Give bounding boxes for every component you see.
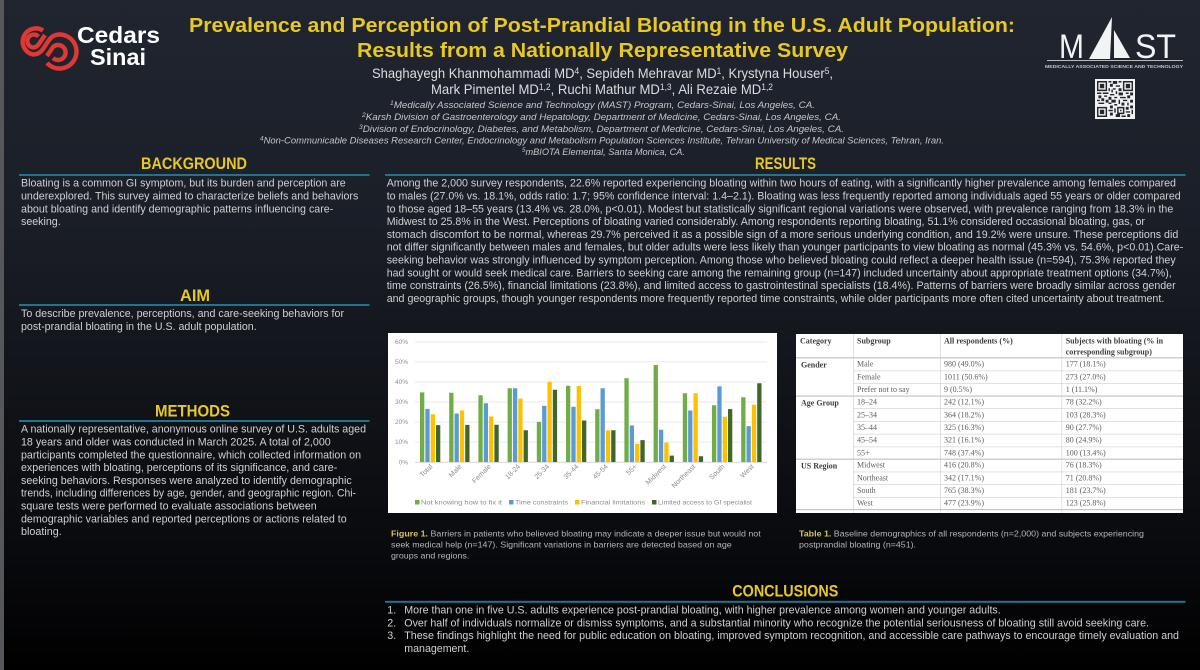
authors: 5 xyxy=(825,66,829,76)
authors: 1,2 xyxy=(761,82,773,92)
row group: US region: Northeast xyxy=(857,473,889,482)
row group: US region: US Region xyxy=(801,462,838,470)
logo: MAST xyxy=(1045,17,1183,69)
legend: Not knowing how to fix it xyxy=(421,500,502,506)
bar chart: barriers to seeking care xyxy=(388,333,777,513)
affiliations xyxy=(260,100,944,158)
affiliations: Medically Associated Science and Technology (MAST) Program, Cedars-Sinai, Los Angeles, CA. xyxy=(394,100,815,111)
row group: gender xyxy=(801,360,1106,394)
numbered list: 1. xyxy=(387,604,396,616)
row group: gender: Male xyxy=(857,360,874,369)
row group: US region: 76 (18.3%) xyxy=(1066,461,1102,470)
row group: age group: 35–44 xyxy=(857,423,877,432)
text block: experiences with bloating, perceptions of its significance, and care- xyxy=(21,462,338,474)
legend: Time constraints xyxy=(515,500,569,506)
figure caption: seek medical help (n=147). Significant variations in barriers are detected based on age xyxy=(391,540,732,550)
y axis labels: 0% xyxy=(399,459,408,466)
text block: stomach discomfort to be normal, whereas 29.7% perceived it as a possible sign of a more serious underlying condition, and 19.2% were unsure. These perceptions did xyxy=(387,229,1178,241)
authors: Shaghayegh Khanmohammadi MD xyxy=(372,65,590,81)
row group: age group: 78 (32.2%) xyxy=(1066,397,1102,406)
row group: age group: Age Group xyxy=(801,398,839,408)
text block: A nationally representative, anonymous online survey of U.S. adults aged xyxy=(21,424,366,436)
table header: Category xyxy=(800,336,832,346)
x axis labels xyxy=(419,463,756,490)
row group: US region: 123 (25.8%) xyxy=(1066,499,1106,508)
authors: 1,2 xyxy=(539,82,551,92)
row group: US region: 342 (17.1%) xyxy=(944,473,984,482)
wordmark: Cedars xyxy=(77,22,160,48)
y axis labels: 30% xyxy=(395,399,408,406)
row group: US region: South xyxy=(857,486,876,495)
authors: 1,3 xyxy=(660,82,672,92)
x axis labels: 55+ xyxy=(625,463,639,477)
text block: about bloating and identify demographic patterns influencing care- xyxy=(21,203,334,215)
text block: underexplored. This survey aimed to characterize beliefs and behaviors xyxy=(21,190,358,202)
row group: US region: Midwest xyxy=(857,461,886,470)
row group: age group: 80 (24.9%) xyxy=(1066,436,1102,445)
panel: conclusions xyxy=(385,582,1186,655)
row group: age group: 25–34 xyxy=(857,410,877,419)
y axis labels: 20% xyxy=(395,419,408,426)
affiliations: 3 xyxy=(359,124,363,131)
affiliations: 2 xyxy=(361,112,366,119)
numbered list: 2. xyxy=(387,617,396,629)
text block: square tests were performed to evaluate associations between xyxy=(21,500,317,512)
figure caption: Figure 1. Barriers in patients who believed bloating may indicate a deeper issue but would not xyxy=(391,529,761,539)
heading: CONCLUSIONS xyxy=(732,582,838,601)
table: baseline demographics xyxy=(796,334,1183,513)
legend: Financial limitations xyxy=(581,500,646,506)
table caption: postprandial bloating (n=451). xyxy=(799,540,916,550)
row group: age group: 55+ xyxy=(857,448,870,457)
series: limited access to GI specialist xyxy=(436,383,762,462)
row group: gender: 273 (27.0%) xyxy=(1066,372,1106,381)
row group: gender: Prefer not to say xyxy=(857,385,910,394)
icon: QR code xyxy=(1095,79,1135,119)
row group: age group: 748 (37.4%) xyxy=(944,448,984,457)
table header: All respondents (%) xyxy=(944,336,1013,346)
text block: post-prandial bloating in the U.S. adult population. xyxy=(21,321,257,333)
series: time constraints xyxy=(425,386,751,462)
authors: , Ruchi Mathur MD xyxy=(551,81,660,97)
x axis labels: 35-44 xyxy=(563,463,580,481)
heading: BACKGROUND xyxy=(141,154,247,173)
text block: demographic variables and reported perceptions or actions related to xyxy=(21,513,347,525)
title: Results from a Nationally Representative Survey xyxy=(357,39,849,62)
numbered list xyxy=(387,604,1179,655)
wordmark letters: M xyxy=(1059,28,1084,66)
y axis labels: 60% xyxy=(395,339,408,346)
icon: sails xyxy=(1089,17,1130,59)
icon: interlocking red rings xyxy=(23,28,77,68)
authors: , Krystyna Houser xyxy=(721,65,825,81)
affiliations: Division of Endocrinology, Diabetes, and Metabolism, Department of Medicine, Cedars-Sinai, Los Angeles, CA. xyxy=(363,124,844,135)
row group: US region: 181 (23.7%) xyxy=(1066,486,1106,495)
numbered list: More than one in five U.S. adults experience post-prandial bloating, with higher prevalence among women and younger adults. xyxy=(404,604,1001,616)
text block xyxy=(387,178,1184,305)
table header: Subjects with bloating (% in xyxy=(1066,336,1164,346)
text block xyxy=(21,424,366,538)
row group: gender: 980 (49.0%) xyxy=(944,360,984,369)
authors: , Ali Rezaie MD xyxy=(672,81,761,97)
y axis labels: 50% xyxy=(395,359,408,366)
affiliations: 1 xyxy=(390,100,394,107)
numbered list: 3. xyxy=(387,630,396,642)
x axis labels: Male xyxy=(448,463,464,479)
text block: seeking behaviors. Responses were analyzed to identify demographic xyxy=(21,475,352,487)
x axis labels: Total xyxy=(419,463,435,479)
legend xyxy=(415,500,752,506)
title: Prevalence and Perception of Post-Prandial Bloating in the U.S. Adult Population: xyxy=(189,14,1015,37)
affiliations: 4 xyxy=(260,136,264,142)
text block: participants completed the questionnaire, which collected information on xyxy=(21,449,361,461)
panel: results xyxy=(385,154,1186,305)
logo: Cedars-Sinai: Sinai xyxy=(90,44,146,70)
x axis labels: West xyxy=(739,463,756,480)
row group: US region xyxy=(801,461,1106,508)
row group: age group: 103 (28.3%) xyxy=(1066,410,1106,419)
y axis labels: 10% xyxy=(395,439,408,446)
row group: age group: 45–54 xyxy=(857,436,877,445)
row group: age group: 100 (13.4%) xyxy=(1066,448,1106,457)
row group: gender: 177 (18.1%) xyxy=(1066,360,1106,369)
text block: Midwest to 25.8% in the West. Perceptions of bloating varied considerably. Among respondents reporting bloating, 51.1% considered occasional bloating, gas, or xyxy=(387,216,1145,228)
table caption: Table 1. Baseline demographics of all respondents (n=2,000) and subjects experiencing xyxy=(799,529,1144,539)
x axis labels: 45-54 xyxy=(592,463,610,481)
authors: Mark Pimentel MD xyxy=(431,81,546,97)
row group: age group: 242 (12.1%) xyxy=(944,397,984,406)
text block: seeking. xyxy=(21,216,61,228)
text block xyxy=(21,308,344,333)
row group: US region: 765 (38.3%) xyxy=(944,486,984,495)
row group: age group xyxy=(801,397,1106,457)
row group: US region: 71 (20.8%) xyxy=(1066,473,1102,482)
text block: Among the 2,000 survey respondents, 22.6% reported experiencing bloating within two hours of eating, with a significantly higher prevalence among females compared xyxy=(387,178,1176,190)
wordmark letters xyxy=(1059,28,1176,66)
row group: US region: 477 (23.9%) xyxy=(944,499,984,508)
authors: , xyxy=(829,65,833,81)
numbered list: management. xyxy=(404,643,469,655)
figure caption: groups and regions. xyxy=(391,550,469,560)
text block: trends, including differences by age, gender, and geographic region. Chi- xyxy=(21,488,356,500)
figure caption xyxy=(391,529,761,560)
series: not knowing how to fix it xyxy=(420,365,746,462)
text block: not differ significantly between males and females, but older adults were less likely than younger participants to view bloating as normal (45.3% vs. 54.6%, p<0.01).Care- xyxy=(387,242,1184,254)
text block: time constraints (26.5%), financial limitations (23.8%), and limited access to gastrointestinal specialists (18.4%). Patterns of barriers were broadly similar across gender xyxy=(387,280,1176,292)
y axis labels xyxy=(395,339,408,466)
logo: Cedars-Sinai xyxy=(23,22,160,70)
authors: , Sepideh Mehravar MD xyxy=(579,65,717,81)
panel: background xyxy=(19,154,370,228)
row group: US region: 416 (20.8%) xyxy=(944,461,984,470)
text block: to those aged 18–55 years (13.4% vs. 28.0%, p<0.01). Modest but statistically significant regional variations were observed, with prevalence ranging from 18.3% in the xyxy=(387,203,1173,215)
table header xyxy=(800,336,1164,356)
row group: gender: 9 (0.5%) xyxy=(944,385,972,394)
x axis labels: South xyxy=(709,463,726,481)
row group: gender: Gender xyxy=(801,360,827,370)
y axis labels: 40% xyxy=(395,379,408,386)
text block: had sought or would seek medical care. Barriers to seeking care among the remaining group (n=147) included uncertainty about appropriate treatment options (34.7%), xyxy=(387,267,1172,279)
x axis labels: Northeast xyxy=(671,463,697,490)
heading: METHODS xyxy=(155,402,230,420)
affiliations: Non-Communicable Diseases Research Center, Endocrinology and Metabolism Population Sciences Institute, Tehran University of Medical Sciences, Tehran, Iran. xyxy=(264,136,944,146)
affiliations: Karsh Division of Gastroenterology and Hepatology, Department of Medicine, Cedars-Sinai, Los Angeles, CA. xyxy=(366,112,841,123)
row group: age group: 321 (16.1%) xyxy=(944,436,984,445)
affiliations: 5 xyxy=(522,147,526,154)
numbered list: These findings highlight the need for public education on bloating, improved symptom recognition, and accessible care pathways to encourage timely evaluation and xyxy=(404,630,1179,642)
text block: bloating. xyxy=(21,526,62,538)
x axis labels: 18-24 xyxy=(504,463,522,481)
row group: age group: 325 (16.3%) xyxy=(944,423,984,432)
authors: 1 xyxy=(717,66,721,76)
authors: 4 xyxy=(575,66,579,76)
text block: Bloating is a common GI symptom, but its burden and perception are xyxy=(21,178,346,190)
text block: and geographic groups, though younger respondents more frequently reported time constraints, while older participants more often cited uncertainty about treatment. xyxy=(387,293,1164,305)
table caption xyxy=(799,529,1144,550)
table header: Subgroup xyxy=(857,336,891,346)
affiliations: mBIOTA Elemental, Santa Monica, CA. xyxy=(525,147,685,158)
row group: gender: 1 (11.1%) xyxy=(1066,385,1098,394)
row group: age group: 90 (27.7%) xyxy=(1066,423,1102,432)
authors xyxy=(372,65,833,97)
panel: aim xyxy=(19,286,370,333)
wordmark letters: ST xyxy=(1135,28,1176,66)
text block: to males (27.0% vs. 18.1%, odds ratio: 1.7; 95% confidence interval: 1.4–2.1). Bloating was less frequently reported among individuals aged 55 years or older compared xyxy=(387,190,1181,202)
row group: age group: 18–24 xyxy=(857,397,877,406)
x axis labels: Female xyxy=(471,463,493,485)
series: financial limitations xyxy=(431,382,756,462)
x axis labels: 25-34 xyxy=(534,463,551,481)
heading: AIM xyxy=(180,286,210,305)
table header: corresponding subgroup) xyxy=(1066,348,1152,356)
text block xyxy=(21,178,358,228)
panel: methods xyxy=(19,402,370,538)
text block: 18 years and older was conducted in March 2025. A total of 2,000 xyxy=(21,436,331,448)
text block: seeking behavior was strongly influenced by symptom perception. Among those who believed bloating could reflect a deeper health issue (n=594), 75.3% reported they xyxy=(387,254,1176,266)
row group: US region: West xyxy=(857,499,874,508)
tagline: MEDICALLY ASSOCIATED SCIENCE AND TECHNOLOGY xyxy=(1045,64,1183,69)
numbered list: Over half of individuals normalize or dismiss symptoms, and a substantial minority who recognize the potential seriousness of bloating still avoid seeking care. xyxy=(404,617,1149,629)
row group: gender: 1011 (50.6%) xyxy=(944,372,988,381)
text block: To describe prevalence, perceptions, and care-seeking behaviors for xyxy=(21,308,344,320)
heading: RESULTS xyxy=(755,154,816,173)
x axis labels: Midwest xyxy=(645,463,668,487)
row group: age group: 364 (18.2%) xyxy=(944,410,984,419)
legend: Limited access to GI specialist xyxy=(658,500,752,506)
title xyxy=(189,14,1015,62)
row group: gender: Female xyxy=(857,372,881,381)
